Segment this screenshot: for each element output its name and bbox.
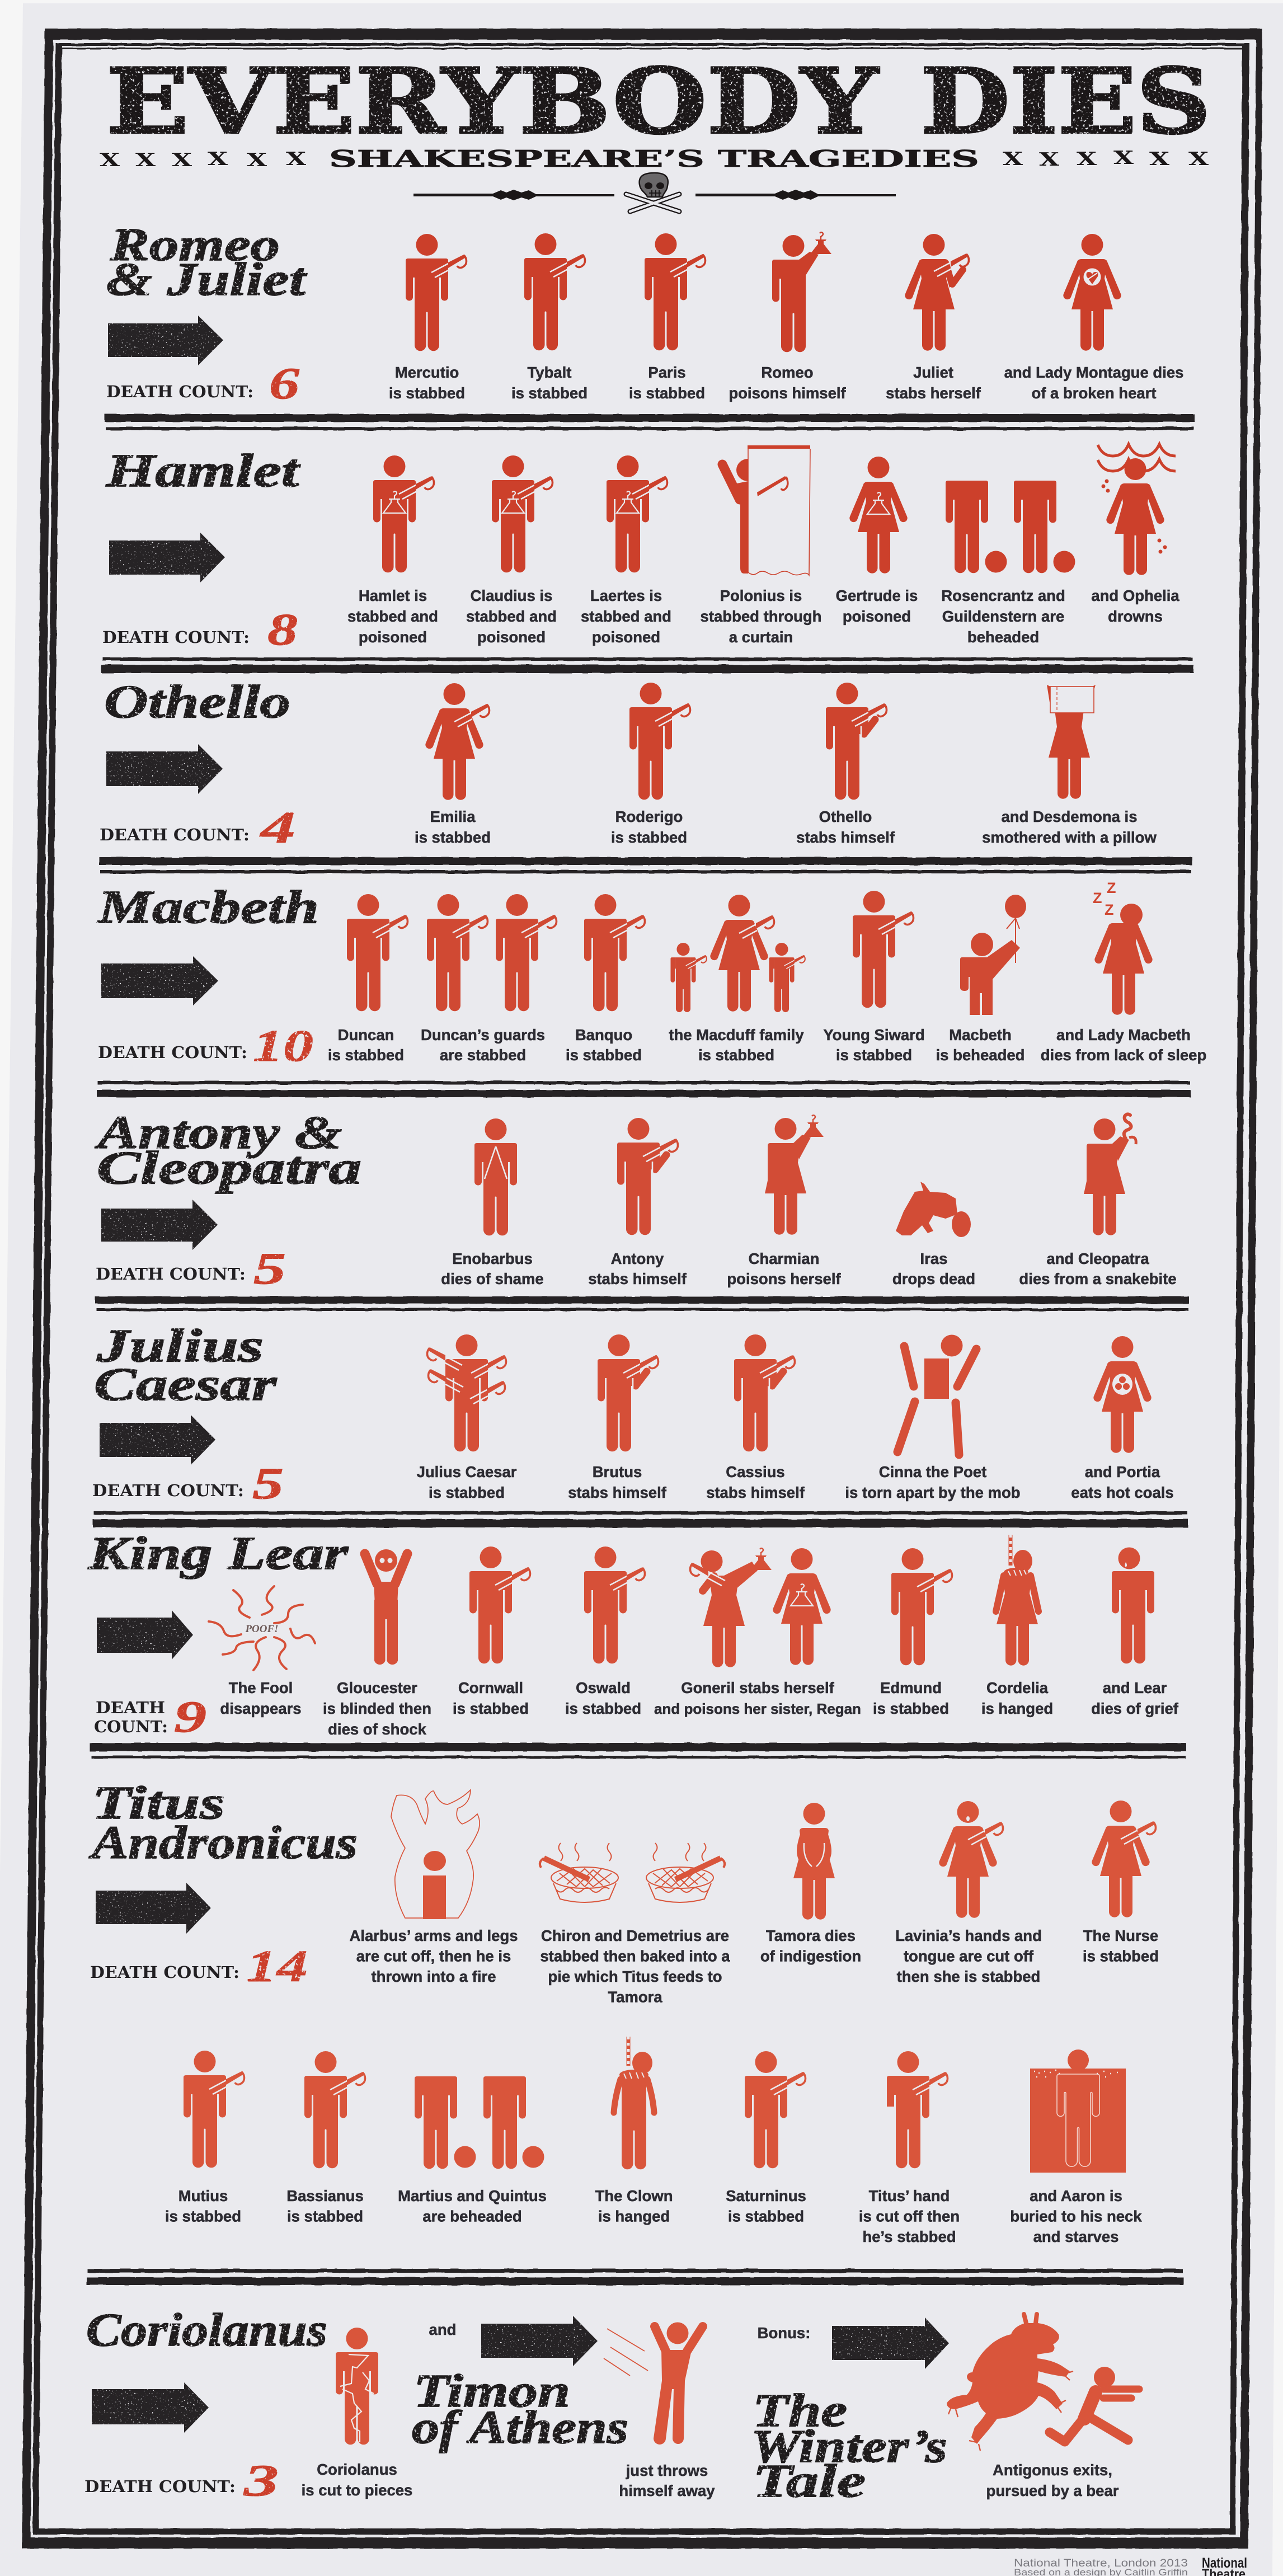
caption: Laertes: stabbed and	[581, 608, 671, 625]
arrow	[101, 1200, 218, 1250]
caption: Brutus: Brutus	[593, 1463, 642, 1480]
icon: bear	[947, 2314, 1073, 2451]
figure: Macbeth beheaded holding head	[960, 895, 1026, 1015]
figure: Lear dies of grief	[1112, 1548, 1154, 1663]
arrow	[109, 533, 225, 582]
death count: 5	[253, 1244, 286, 1294]
figure: Cornwall stabbed	[469, 1546, 530, 1663]
figure: Young Siward stabbed	[853, 891, 913, 1008]
heading	[412, 2365, 628, 2453]
death count: 6	[269, 359, 299, 408]
panel: Macbeth	[96, 880, 1206, 1071]
caption: Duncan: Duncan	[338, 1026, 394, 1043]
caption: Polonius: Polonius is	[720, 587, 802, 604]
arrow	[97, 1610, 193, 1660]
death count	[102, 605, 298, 655]
caption: Hamlet: stabbed and	[347, 608, 438, 625]
caption: Chiron and Demetrius: Chiron and Demetrius are	[541, 1927, 729, 1944]
figure: Brutus stabs himself	[598, 1334, 658, 1451]
label: Bonus: Bonus:	[758, 2324, 810, 2342]
caption: Charmian: Charmian	[749, 1250, 819, 1267]
caption: Iras: Iras	[920, 1250, 947, 1267]
heading: Antony &	[95, 1107, 342, 1159]
caption: Cornwall: is stabbed	[453, 1700, 529, 1717]
caption: Tamora: Tamora dies	[766, 1927, 856, 1944]
caption: Cleopatra: dies from a snakebite	[1019, 1270, 1177, 1287]
caption: Cassius: Cassius	[726, 1463, 785, 1480]
heading: Othello	[104, 676, 290, 728]
figure: Lady Macbeth asleep: Z	[1107, 880, 1116, 896]
panel: Othello	[100, 676, 1157, 853]
row of X ornaments, right	[1003, 147, 1209, 170]
caption: Paris: Paris	[648, 364, 686, 381]
figure: Othello stabs himself	[826, 683, 886, 800]
caption: Cassius: stabs himself	[706, 1484, 805, 1501]
figure: Goneril and Regan	[690, 1548, 831, 1667]
heading: Romeo	[110, 219, 280, 271]
figure: Coriolanus cut to pieces	[336, 2328, 378, 2445]
caption: Macbeth: is beheaded	[936, 1046, 1024, 1064]
caption: Tamora: of indigestion	[760, 1947, 861, 1965]
caption: Coriolanus: Coriolanus	[317, 2461, 397, 2478]
caption: Lavinia: Lavinia’s hands and	[895, 1927, 1042, 1944]
arrow	[92, 2382, 209, 2433]
caption: Antony: stabs himself	[588, 1270, 687, 1287]
caption: Juliet: stabs herself	[886, 384, 981, 402]
icon: skull and crossbones	[626, 173, 679, 211]
arrow	[481, 2316, 598, 2366]
credits	[1014, 2555, 1247, 2576]
figure: Laertes	[607, 455, 667, 572]
caption: Banquo: is stabbed	[566, 1046, 642, 1064]
heading: The	[753, 2385, 847, 2437]
row of X ornaments, left: X	[286, 148, 307, 170]
connector word: and: and	[429, 2321, 456, 2338]
figure: Paris stabbed	[645, 233, 705, 350]
caption: Lady Montague: and Lady Montague dies	[1004, 364, 1183, 381]
title block	[100, 49, 1211, 211]
figure: Mercutio stabbed	[406, 234, 467, 351]
panel: Julius Caesar	[92, 1320, 1174, 1508]
heading: Timon	[413, 2365, 570, 2417]
caption: Gloucester: dies of shock	[328, 1721, 427, 1738]
logo: National Theatre	[1202, 2555, 1247, 2576]
figure: Martius beheaded	[415, 2076, 476, 2169]
row of X ornaments, right: X	[1003, 148, 1023, 170]
figure: Gloucester blinded	[365, 1549, 407, 1665]
figure: Hamlet	[373, 455, 434, 572]
death count: COUNT:	[94, 1717, 168, 1736]
heading	[94, 1320, 278, 1411]
caption: Lady Montague: of a broken heart	[1031, 384, 1157, 402]
icon: Fool vanishing, POOF	[209, 1586, 315, 1670]
death count: 9	[174, 1693, 206, 1742]
figure: Duncan stabbed	[347, 894, 407, 1011]
caption: Rosencrantz and Guildenstern: Rosencrantz and	[941, 587, 1065, 604]
death count: DEATH COUNT:	[100, 825, 250, 844]
row of X ornaments, left	[100, 148, 307, 171]
caption: Roderigo: Roderigo	[615, 808, 683, 825]
figure: The Nurse stabbed	[1092, 1801, 1156, 1917]
heading	[106, 219, 307, 305]
death count: 3	[243, 2456, 279, 2506]
caption: Tybalt: is stabbed	[511, 384, 588, 402]
figure: The Clown hanged	[614, 2037, 654, 2169]
figure: Gertrude poisoned	[849, 457, 908, 574]
heading	[751, 2385, 947, 2507]
heading	[88, 1777, 358, 1869]
heading: of Athens	[412, 2401, 628, 2453]
caption: The Nurse: is stabbed	[1083, 1947, 1159, 1965]
caption: Gloucester: is blinded then	[323, 1700, 431, 1717]
caption: Claudius: poisoned	[477, 628, 546, 646]
figure: Cassius stabs himself	[734, 1334, 795, 1451]
caption: Ophelia: and Ophelia	[1091, 587, 1179, 604]
caption: Duncan: is stabbed	[328, 1046, 404, 1064]
caption: Lavinia: then she is stabbed	[897, 1968, 1040, 1985]
subtitle: SHAKESPEARE’S TRAGEDIES	[329, 145, 979, 172]
caption: Hamlet: Hamlet is	[359, 587, 427, 604]
caption: Hamlet: poisoned	[359, 628, 427, 646]
caption: Saturninus: Saturninus	[726, 2187, 806, 2204]
death count: 10	[253, 1022, 313, 1071]
caption: Lear: dies of grief	[1091, 1700, 1179, 1717]
figure: Alarbus in fire	[391, 1790, 480, 1919]
arrow	[108, 316, 223, 365]
figure: Lady Macbeth asleep	[1093, 880, 1153, 1015]
caption: Bassianus: is stabbed	[287, 2208, 363, 2225]
heading: Macbeth	[96, 881, 319, 933]
death count: DEATH COUNT:	[90, 1963, 239, 1982]
caption: The Clown: is hanged	[598, 2208, 670, 2225]
death count	[94, 1693, 206, 1742]
death count	[100, 803, 295, 853]
ornamental rule, right	[695, 190, 896, 200]
caption: The Fool: disappears	[220, 1700, 302, 1717]
caption: Young Siward: Young Siward	[823, 1026, 925, 1043]
panel: Timon of Athens	[412, 2316, 715, 2499]
row of X ornaments, right: X	[1039, 148, 1060, 170]
caption: Martius and Quintus: are beheaded	[422, 2208, 522, 2225]
figure: Tybalt stabbed	[524, 233, 585, 350]
caption: Roderigo: is stabbed	[611, 829, 687, 846]
figure: Claudius	[492, 455, 553, 572]
caption: Emilia: Emilia	[430, 808, 476, 825]
figure: Enobarbus shamed	[474, 1118, 517, 1235]
heading: Coriolanus	[86, 2304, 327, 2356]
caption: the Macduff family: is stabbed	[698, 1046, 774, 1064]
caption: Aaron: and Aaron is	[1030, 2187, 1122, 2204]
caption: Lear: and Lear	[1103, 1679, 1167, 1696]
caption: Claudius: stabbed and	[466, 608, 557, 625]
caption: Chiron and Demetrius: pie which Titus feeds to	[548, 1968, 722, 1985]
caption: Emilia: is stabbed	[415, 829, 491, 846]
caption: Iras: drops dead	[892, 1270, 975, 1287]
row of X ornaments, left: X	[135, 149, 156, 171]
caption: Enobarbus: dies of shame	[441, 1270, 544, 1287]
caption: Desdemona: smothered with a pillow	[982, 829, 1157, 846]
death count: DEATH COUNT:	[98, 1043, 247, 1062]
caption: Chiron and Demetrius: Tamora	[608, 1989, 662, 2005]
death count: DEATH	[96, 1698, 165, 1717]
caption: Saturninus: is stabbed	[728, 2208, 804, 2225]
caption: Oswald: is stabbed	[565, 1700, 641, 1717]
arrow	[100, 1415, 215, 1465]
death count: DEATH COUNT:	[102, 628, 250, 647]
figure: Banquo stabbed	[584, 894, 645, 1011]
figure: Guildenstern beheaded	[1014, 481, 1075, 573]
caption: Lady Macbeth: dies from lack of sleep	[1041, 1046, 1206, 1064]
logo: National Theatre: National	[1202, 2555, 1247, 2571]
death count	[84, 2456, 279, 2506]
panel: Titus Andronicus	[88, 1777, 1159, 2245]
caption: Paris: is stabbed	[629, 384, 705, 402]
caption: Othello: stabs himself	[796, 829, 895, 846]
caption: The Clown: The Clown	[595, 2187, 673, 2204]
caption: Polonius: stabbed through	[701, 608, 821, 625]
caption: Gertrude: Gertrude is	[836, 587, 918, 604]
heading: Tale	[753, 2455, 866, 2507]
figure: Antigonus running	[1050, 2367, 1139, 2442]
figure: Desdemona smothered	[1047, 685, 1096, 799]
heading: Julius	[96, 1320, 264, 1372]
caption: Charmian: poisons herself	[727, 1270, 841, 1287]
death count: DEATH COUNT:	[84, 2477, 236, 2496]
figure: Julius Caesar multiple stabs	[427, 1334, 506, 1451]
panel: King Lear	[88, 1527, 1179, 1742]
caption: Desdemona: and Desdemona is	[1002, 808, 1137, 825]
caption: Cinna the Poet: Cinna the Poet	[879, 1463, 986, 1480]
caption: Lady Macbeth: and Lady Macbeth	[1056, 1026, 1191, 1043]
heading: Andronicus	[88, 1817, 358, 1869]
caption: Cordelia: is hanged	[981, 1700, 1053, 1717]
figure: Quintus beheaded	[483, 2076, 544, 2169]
caption: Goneril and Regan: Goneril stabs herself	[681, 1679, 834, 1696]
caption: Antigonus: pursued by a bear	[986, 2482, 1119, 2499]
figure: Roderigo stabbed	[629, 683, 690, 800]
row of X ornaments, right: X	[1113, 147, 1134, 168]
arrow	[96, 1883, 211, 1934]
figure: the Macduff family stabbed	[670, 895, 805, 1012]
death count: 5	[252, 1459, 284, 1508]
caption: Timon: himself away	[619, 2482, 715, 2499]
caption: Gertrude: poisoned	[843, 608, 911, 625]
row of X ornaments, right: X	[1077, 148, 1097, 170]
death count: 4	[259, 803, 295, 853]
caption: Alarbus: are cut off, then he is	[356, 1947, 511, 1965]
caption: Bassianus: Bassianus	[286, 2187, 364, 2204]
caption: Julius Caesar: is stabbed	[429, 1484, 505, 1501]
figure: Romeo with poison	[772, 232, 831, 352]
panel: The Winter's Tale bonus	[751, 2314, 1139, 2507]
figure: Ophelia drowning	[1098, 444, 1176, 575]
panel: Coriolanus	[84, 2304, 412, 2506]
caption: Chiron and Demetrius: stabbed then baked into a	[540, 1947, 730, 1965]
caption: Enobarbus: Enobarbus	[452, 1250, 533, 1267]
death count	[92, 1459, 284, 1508]
death count	[106, 359, 299, 408]
figure: Juliet stabs herself	[905, 234, 969, 351]
figure: Rosencrantz beheaded	[946, 481, 1007, 573]
caption: Banquo: Banquo	[575, 1026, 632, 1043]
figure: Edmund stabbed	[891, 1548, 952, 1665]
row of X ornaments, right: X	[1188, 148, 1209, 170]
caption: Titus: Titus’ hand	[869, 2187, 950, 2204]
death count: 14	[246, 1942, 308, 1991]
death count	[98, 1022, 313, 1071]
heading	[95, 1107, 361, 1194]
caption: Macbeth: Macbeth	[949, 1026, 1012, 1043]
figure: Lady Macbeth asleep: Z	[1105, 901, 1113, 918]
caption: Ophelia: drowns	[1108, 608, 1163, 625]
caption: Titus: he’s stabbed	[862, 2228, 956, 2245]
figure: Tamora indigestion	[793, 1803, 835, 1920]
caption: Othello: Othello	[819, 808, 872, 825]
figure: Aaron buried	[1030, 2049, 1126, 2173]
figure: Portia eats hot coals	[1093, 1336, 1152, 1453]
caption: Juliet: Juliet	[913, 364, 953, 381]
credit text: National Theatre, London 2013	[1014, 2558, 1188, 2569]
caption: Edmund: is stabbed	[873, 1700, 949, 1717]
caption: Goneril and Regan: and poisons her sister, Regan	[654, 1700, 861, 1717]
panel: Romeo and Juliet	[106, 219, 1183, 408]
heading: Cleopatra	[97, 1142, 361, 1194]
figure: Lady Macbeth asleep: Z	[1093, 890, 1102, 906]
caption: Brutus: stabs himself	[568, 1484, 667, 1501]
figure: Mutius stabbed	[184, 2051, 244, 2168]
caption: Alarbus: Alarbus’ arms and legs	[349, 1927, 518, 1944]
caption: Cleopatra: and Cleopatra	[1046, 1250, 1149, 1267]
caption: Aaron: and starves	[1033, 2228, 1118, 2245]
icon: two pies with daggers	[540, 1843, 725, 1902]
death count	[90, 1942, 308, 1991]
caption: Oswald: Oswald	[576, 1679, 631, 1696]
caption: Antony: Antony	[611, 1250, 664, 1267]
row of X ornaments, left: X	[100, 149, 120, 171]
figure: Lady Montague broken heart	[1063, 234, 1121, 351]
heading: King Lear	[88, 1527, 349, 1580]
caption: Lavinia: tongue are cut off	[904, 1947, 1034, 1965]
motion lines	[604, 2329, 648, 2376]
panel: Antony and Cleopatra	[95, 1107, 1177, 1294]
heading: Hamlet	[106, 445, 301, 497]
title	[106, 49, 1211, 154]
arrow	[832, 2318, 949, 2369]
caption: Rosencrantz and Guildenstern: Guildenstern are	[942, 608, 1064, 625]
caption: Cinna the Poet: is torn apart by the mob	[845, 1484, 1021, 1501]
caption: Julius Caesar: Julius Caesar	[417, 1463, 516, 1480]
credit text	[1014, 2558, 1188, 2576]
caption: Coriolanus: is cut to pieces	[302, 2481, 412, 2499]
caption: Laertes: Laertes is	[590, 587, 662, 604]
caption: Young Siward: is stabbed	[836, 1046, 912, 1064]
figure: Cinna torn apart	[897, 1335, 976, 1455]
title: DIES	[920, 49, 1211, 154]
figure: Antony stabs himself	[617, 1118, 678, 1235]
caption: The Fool: The Fool	[229, 1679, 293, 1696]
caption: Mercutio: Mercutio	[395, 364, 459, 381]
caption: Romeo: poisons himself	[729, 384, 847, 402]
row of X ornaments, left: X	[247, 149, 267, 171]
caption: Duncan's guards: are stabbed	[440, 1046, 526, 1064]
figure: Oswald stabbed	[584, 1546, 645, 1663]
row of X ornaments, left: X	[208, 148, 228, 170]
caption: Claudius: Claudius is	[471, 587, 552, 604]
row of X ornaments, left: X	[172, 149, 192, 171]
figure: Polonius behind curtain	[722, 445, 810, 575]
figure: Charmian poisons herself	[765, 1115, 824, 1235]
caption: the Macduff family: the Macduff family	[669, 1026, 804, 1043]
arrow	[101, 956, 218, 1005]
caption: Duncan's guards: Duncan’s guards	[421, 1026, 545, 1043]
icon: Fool vanishing, POOF: POOF!	[245, 1623, 279, 1635]
caption: Edmund: Edmund	[880, 1679, 942, 1696]
caption: Mercutio: is stabbed	[389, 384, 465, 402]
caption: Aaron: buried to his neck	[1010, 2208, 1142, 2225]
caption: Antigonus: Antigonus exits,	[993, 2461, 1112, 2479]
figure: Duncan's guards stabbed	[427, 894, 556, 1011]
figure: Emilia stabbed	[425, 683, 489, 800]
caption: Martius and Quintus: Martius and Quintus	[398, 2187, 547, 2204]
heading: Winter’s	[751, 2420, 947, 2472]
death count: DEATH COUNT:	[106, 382, 253, 401]
caption: Laertes: poisoned	[592, 628, 660, 646]
figure: Bassianus stabbed	[304, 2051, 365, 2168]
caption: Mutius: is stabbed	[165, 2208, 241, 2225]
heading: Caesar	[94, 1358, 278, 1411]
caption: Romeo: Romeo	[761, 364, 814, 381]
caption: Cordelia: Cordelia	[986, 1679, 1048, 1696]
death count: DEATH COUNT:	[92, 1481, 244, 1500]
caption: Cornwall: Cornwall	[458, 1679, 523, 1696]
heading: & Juliet	[106, 253, 307, 305]
figure: Lavinia	[939, 1801, 1003, 1918]
figure: Cleopatra with snake	[1084, 1114, 1136, 1235]
arrow	[106, 744, 223, 794]
figure: Saturninus stabbed	[745, 2051, 806, 2168]
caption: Portia: and Portia	[1085, 1463, 1160, 1480]
caption: Titus: is cut off then	[859, 2208, 960, 2225]
panel: Hamlet	[102, 444, 1179, 655]
row of X ornaments, right: X	[1149, 148, 1170, 170]
figure: Timon throws himself away	[654, 2322, 703, 2445]
caption: Tybalt: Tybalt	[528, 364, 571, 381]
caption: Portia: eats hot coals	[1071, 1484, 1174, 1501]
caption: Mutius: Mutius	[178, 2187, 228, 2204]
figure: Cordelia hanged	[996, 1535, 1038, 1666]
death count	[96, 1244, 286, 1294]
caption: Timon: just throws	[626, 2462, 708, 2479]
death count: DEATH COUNT:	[96, 1265, 246, 1284]
caption: Polonius: a curtain	[729, 628, 793, 646]
caption: Rosencrantz and Guildenstern: beheaded	[967, 628, 1039, 646]
caption: Gloucester: Gloucester	[337, 1679, 417, 1696]
ornamental rule, left	[413, 190, 614, 200]
caption: Alarbus: thrown into a fire	[371, 1968, 496, 1985]
death count: 8	[267, 605, 298, 655]
caption: The Nurse: The Nurse	[1083, 1927, 1158, 1944]
figure: Iras collapsed	[896, 1182, 971, 1237]
title: EVERYBODY	[106, 49, 879, 154]
heading: Titus	[92, 1777, 225, 1829]
figure: Titus hand cut off	[887, 2051, 948, 2168]
